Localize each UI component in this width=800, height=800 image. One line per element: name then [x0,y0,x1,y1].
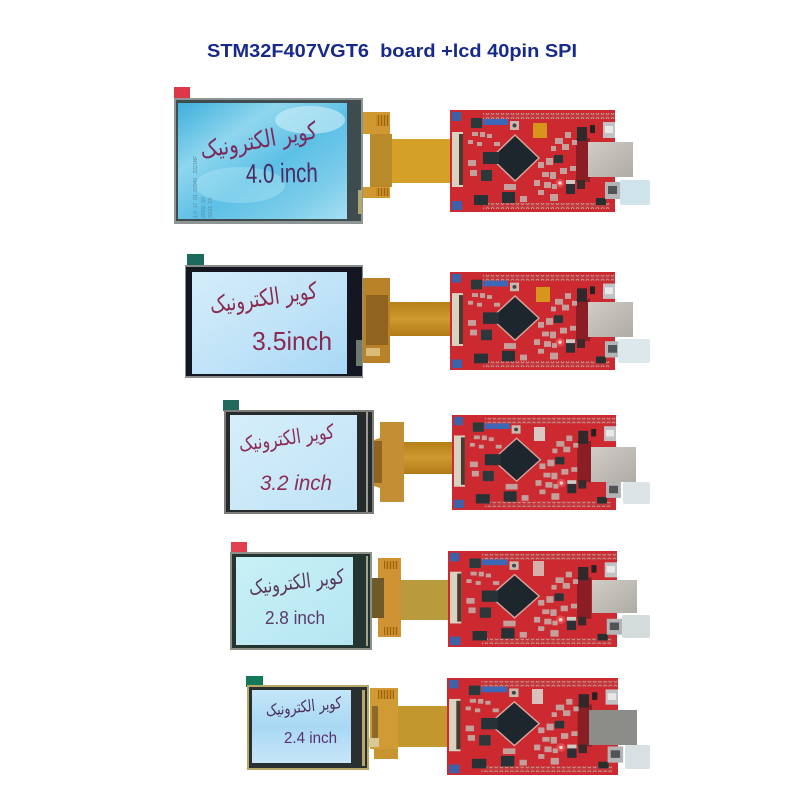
handwritten brand text: کویر الکترونیک [265,693,343,721]
white component block [532,689,543,704]
LCD panel 2.4 inch [247,685,369,770]
screen [178,103,347,219]
FPC connector tail [363,112,392,198]
tab: green [187,254,204,266]
FPC connector tail [374,422,404,502]
size label: 2.4 inch [284,730,337,747]
control board [452,415,650,510]
control board [450,110,650,212]
usb plug [622,615,650,638]
screen [230,415,357,510]
white component block [534,427,545,441]
FPC connector tail [363,278,390,363]
LCD panel 4.0 inch [174,98,363,224]
control board [448,551,650,647]
size label: 3.2 inch [260,472,332,495]
ethernet jack [589,710,637,745]
tab: red [174,87,190,99]
handwritten brand text: کویر الکترونیک [198,116,319,164]
ethernet jack [588,142,633,177]
size label: 4.0 inch [246,158,318,189]
screen [192,272,347,374]
control board [447,678,650,775]
usb plug [625,745,650,769]
LCD panel 3.5 inch [185,265,363,378]
FPC connector tail [372,558,401,637]
tab: green [246,676,263,687]
flexible ribbon cable [398,580,450,620]
usb plug [620,180,650,205]
ethernet jack [592,580,637,613]
flexible ribbon cable [388,302,452,336]
size label: 3.5inch [252,326,332,356]
usb plug [623,482,650,504]
tab: green [223,400,239,411]
flexible ribbon cable [396,706,448,747]
handwritten brand text: کویر الکترونیک [247,564,346,600]
screen [236,557,353,645]
tab: red [231,542,247,553]
faint panel text [193,156,214,218]
ethernet jack [591,447,636,482]
handwritten brand text: کویر الکترونیک [208,278,319,319]
LCD panel 3.2 inch [224,410,374,514]
faint panel text: SD11 .50 [208,197,214,218]
control board [450,272,650,370]
row: 3.5 inch LCD and board [185,254,650,378]
flexible ribbon cable [400,442,453,474]
usb plug [618,339,650,363]
screen [252,690,351,763]
FPC connector tail [367,688,398,759]
handwritten brand text: کویر الکترونیک [237,419,336,456]
row: 2.4 inch LCD and board [246,676,650,775]
ethernet jack [588,302,633,337]
title: STM32F407VGT6 board +lcd 40pin SPI [207,40,577,61]
capacitor [536,287,550,302]
row: 3.2 inch LCD and board [223,400,650,514]
row: 2.8 inch LCD and board [230,542,650,650]
LCD panel 2.8 inch [230,552,372,650]
faint panel text: 2016/ .50 [201,197,207,218]
capacitor [533,123,547,138]
size label: 2.8 inch [265,608,325,628]
row: 4.0 inch LCD and board [174,87,650,224]
faint panel text: 1.0 .17 .01 .02940 . 3221NF [193,156,199,218]
white component block [533,561,544,576]
flexible ribbon cable [388,139,452,183]
